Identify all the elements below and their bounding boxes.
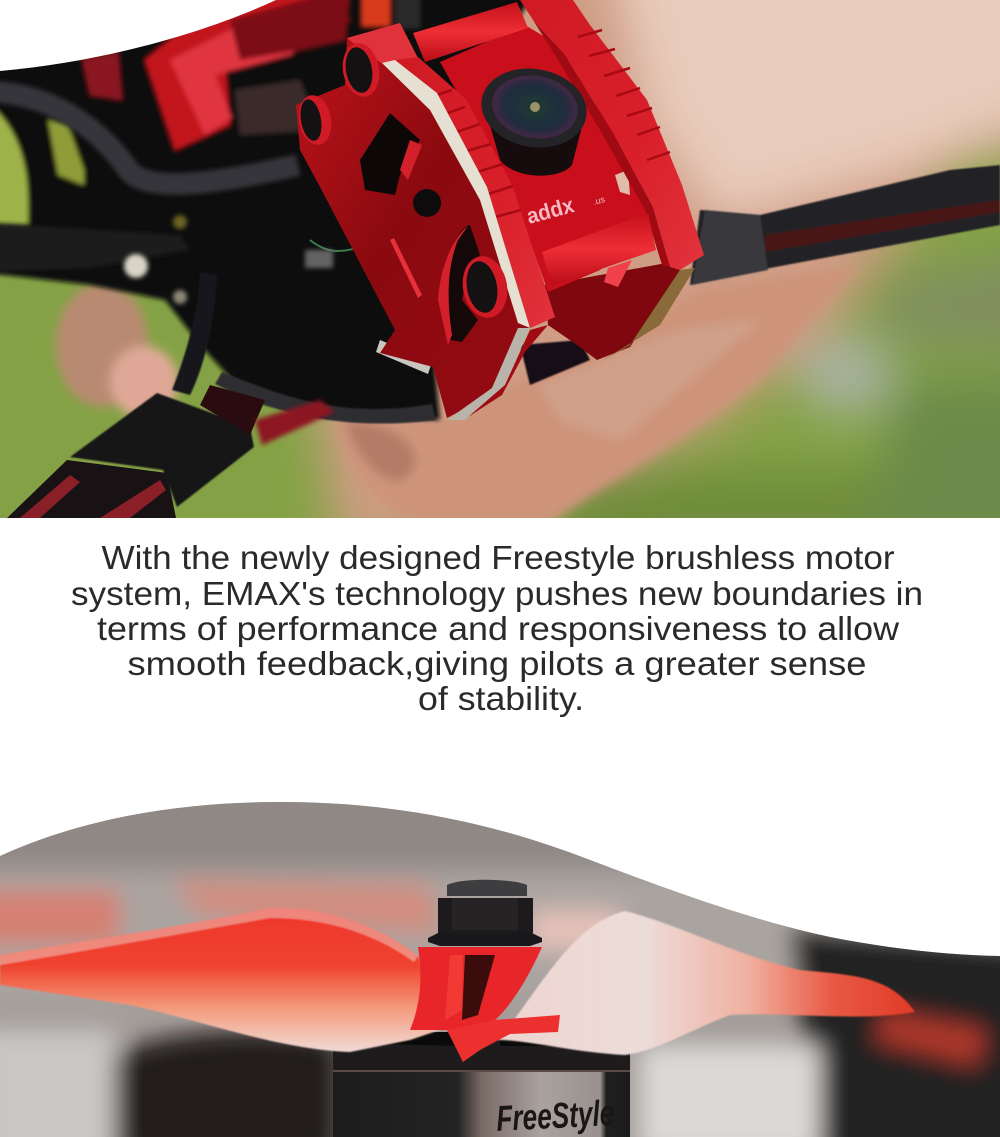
rear lower plate <box>545 262 680 360</box>
description text block <box>71 539 923 717</box>
lower plate cutout <box>438 225 480 342</box>
description text block: of stability. <box>418 680 584 717</box>
right propeller blade <box>498 911 915 1055</box>
blurred fingers <box>56 265 860 530</box>
inner body behind the camera <box>440 25 650 292</box>
red camera mount: .us <box>592 194 607 207</box>
standoff tubes <box>413 2 528 62</box>
slot <box>390 238 422 298</box>
photo: freestyle motor with red propeller <box>0 780 1000 1137</box>
description text block: system, EMAX's technology pushes new boundaries in <box>71 575 923 612</box>
motor bell <box>333 1032 630 1137</box>
description text block: smooth feedback,giving pilots a greater sense <box>128 645 866 682</box>
rear ridged rim <box>520 0 704 270</box>
blurred background <box>0 780 1000 1137</box>
red camera mount <box>295 0 704 420</box>
green gaps through the frame <box>0 105 28 225</box>
description text block: terms of performance and responsiveness to allow <box>97 610 899 647</box>
photo: drone camera held in hand <box>0 0 1000 518</box>
camera lens <box>481 68 587 176</box>
description text block: With the newly designed Freestyle brushless motor <box>102 539 895 576</box>
bolts <box>295 40 512 321</box>
ridged front rim <box>395 57 555 328</box>
front plate cutout <box>360 113 420 195</box>
white curved corner top-left <box>0 0 276 71</box>
prop nut <box>428 880 542 946</box>
bright rim on top corner <box>347 23 418 65</box>
silver chamfer edge <box>382 60 530 328</box>
strap and lower frame arm <box>7 385 335 518</box>
cable: horizontal dark arm <box>0 223 190 272</box>
right carbon arm <box>690 165 1000 285</box>
label on camera body: addx <box>524 192 577 229</box>
frame and electronics, dark area left <box>0 0 590 424</box>
screw <box>413 189 441 217</box>
cable: upper grey arm <box>0 92 298 184</box>
propeller hub <box>410 947 560 1062</box>
left propeller blade <box>0 908 440 1052</box>
front plate <box>296 23 555 418</box>
blurred background: grass and hand <box>0 0 1000 518</box>
